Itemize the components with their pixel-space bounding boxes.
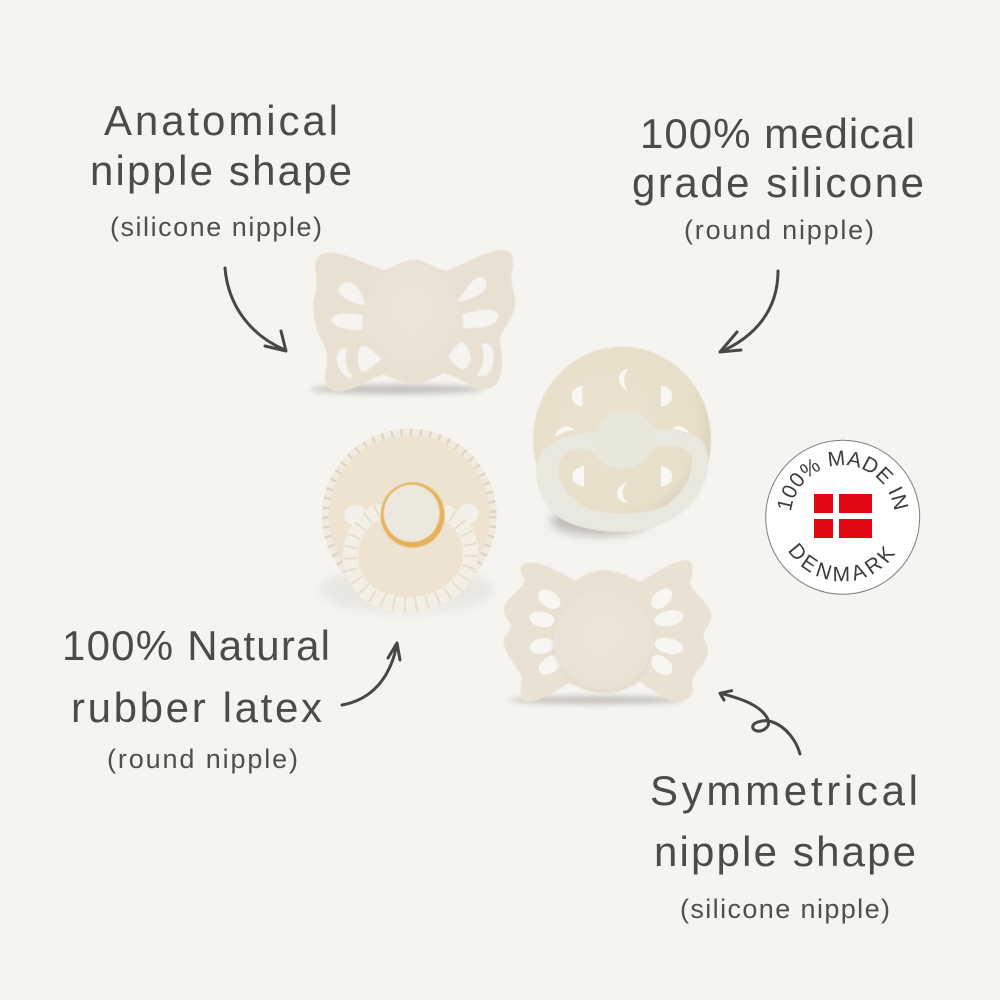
shadow xyxy=(310,385,483,394)
badge: 100% made in Denmark xyxy=(765,440,920,595)
shield xyxy=(533,347,711,532)
arrow: to rope pacifier xyxy=(342,643,400,705)
callout: anatomical nipple shape xyxy=(90,97,352,242)
Danish flag xyxy=(814,494,872,538)
callout: medical grade silicone: grade silicone xyxy=(632,159,924,206)
nipple cap xyxy=(384,485,440,542)
callout: symmetrical nipple shape xyxy=(650,767,918,924)
rope handle xyxy=(351,512,471,606)
callout: symmetrical nipple shape: Symmetrical xyxy=(650,767,918,814)
rope edge xyxy=(325,432,493,600)
cut-outs xyxy=(528,584,685,679)
callout: medical grade silicone xyxy=(632,110,924,245)
callout: medical grade silicone: 100% medical xyxy=(640,110,915,157)
badge top text: 100% MADE IN xyxy=(778,450,908,510)
badge circle xyxy=(766,440,920,594)
handle ring xyxy=(536,427,708,532)
rope edge twist xyxy=(325,432,493,600)
callout: anatomical nipple shape: Anatomical xyxy=(104,97,338,144)
moon cut-outs xyxy=(554,369,689,503)
callout: symmetrical nipple shape: nipple shape xyxy=(654,828,916,875)
shield xyxy=(313,250,515,392)
nipple disc xyxy=(553,589,653,689)
air holes xyxy=(344,505,366,525)
callout: symmetrical nipple shape: (silicone nipple) xyxy=(680,894,890,924)
callout: natural rubber latex: rubber latex xyxy=(71,684,322,731)
shield xyxy=(323,430,495,602)
callout: anatomical nipple shape: (silicone nipple) xyxy=(110,212,322,242)
pacifier: moon round xyxy=(533,347,711,536)
shield xyxy=(503,560,712,702)
arrow: to anatomical pacifier xyxy=(225,268,286,351)
arrow: to moon pacifier xyxy=(720,271,778,352)
air hole right xyxy=(458,503,478,523)
callout: natural rubber latex: 100% Natural xyxy=(62,622,330,669)
nipple disc xyxy=(363,261,461,369)
shadow xyxy=(508,696,685,704)
nipple xyxy=(596,410,654,468)
pacifier: rope round latex xyxy=(320,430,495,613)
nipple edge shade xyxy=(553,590,654,691)
pacifier: butterfly anatomical xyxy=(310,250,515,394)
shadow xyxy=(550,508,650,536)
rope handle twist xyxy=(351,512,471,606)
callout: natural rubber latex xyxy=(62,622,330,774)
callout: anatomical nipple shape: nipple shape xyxy=(90,147,352,194)
callout: natural rubber latex: (round nipple) xyxy=(107,744,298,774)
badge bottom text: DENMARK xyxy=(788,542,896,582)
latex nipple xyxy=(381,482,445,548)
arrow: to symmetrical pacifier xyxy=(720,691,800,754)
pacifier: butterfly symmetrical xyxy=(503,560,712,704)
shadow xyxy=(320,567,493,613)
callout: medical grade silicone: (round nipple) xyxy=(684,215,874,245)
